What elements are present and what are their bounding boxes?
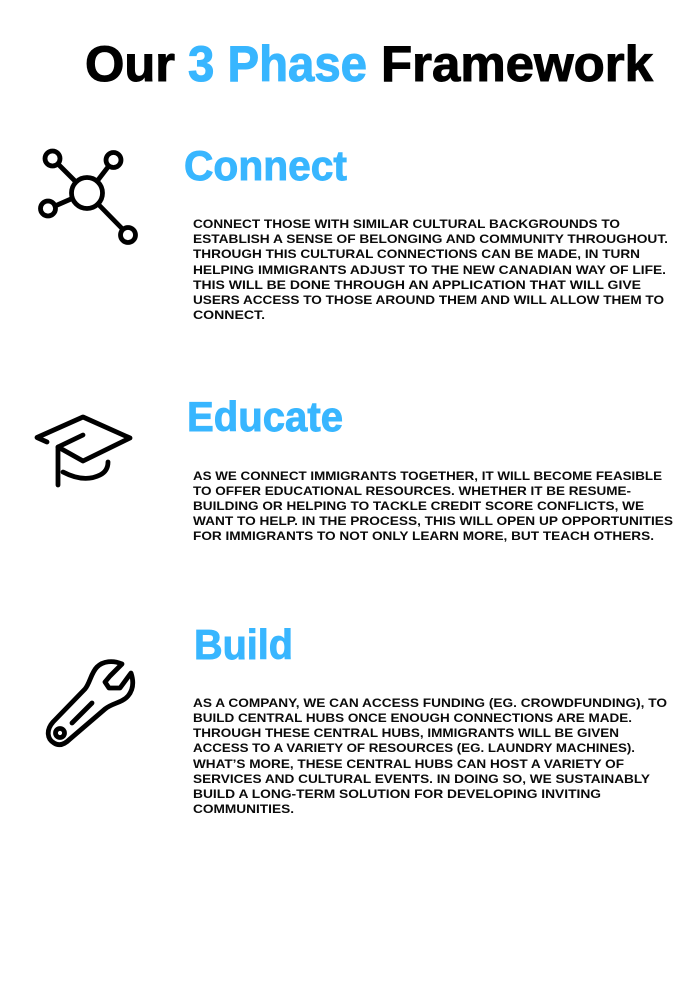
- icon: wrench: [48, 662, 133, 745]
- text block: Connect description: CONNECT.: [193, 308, 265, 322]
- heading: Build: Build: [194, 621, 293, 668]
- text block: Build description: SERVICES AND CULTURAL EVENTS. IN DOING SO, WE SUSTAINABLY: [193, 772, 650, 786]
- text block: Build description: AS A COMPANY, WE CAN ACCESS FUNDING (EG. CROWDFUNDING), TO: [193, 696, 667, 710]
- text block: Connect description: [193, 217, 668, 322]
- heading: Educate: Educate: [187, 393, 343, 440]
- text block: Build description: [193, 696, 667, 816]
- text block: Connect description: CONNECT THOSE WITH SIMILAR CULTURAL BACKGROUNDS TO: [193, 217, 620, 231]
- text block: Educate description: WANT TO HELP. IN THE PROCESS, THIS WILL OPEN UP OPPORTUNITIES: [193, 514, 673, 528]
- text block: Educate description: AS WE CONNECT IMMIGRANTS TOGETHER, IT WILL BECOME FEASIBLE: [193, 469, 662, 483]
- text block: Connect description: ESTABLISH A SENSE OF BELONGING AND COMMUNITY THROUGHOUT.: [193, 232, 668, 246]
- text block: Connect description: USERS ACCESS TO THOSE AROUND THEM AND WILL ALLOW THEM TO: [193, 293, 664, 307]
- text block: Connect description: HELPING IMMIGRANTS ADJUST TO THE NEW CANADIAN WAY OF LIFE.: [193, 263, 666, 277]
- text block: Build description: BUILD CENTRAL HUBS ONCE ENOUGH CONNECTIONS ARE MADE.: [193, 711, 632, 725]
- title: Our: [85, 36, 175, 92]
- title: Framework: [381, 36, 653, 92]
- text block: Build description: BUILD A LONG-TERM SOLUTION FOR DEVELOPING INVITING: [193, 787, 601, 801]
- text block: Educate description: BUILDING OR HELPING TO TACKLE CREDIT SCORE CONFLICTS, WE: [193, 499, 644, 513]
- heading: Connect: Connect: [184, 142, 347, 189]
- text block: Connect description: THROUGH THIS CULTURAL CONNECTIONS CAN BE MADE, IN TURN: [193, 247, 640, 261]
- text block: Build description: COMMUNITIES.: [193, 802, 294, 816]
- text block: Build description: ACCESS TO A VARIETY OF RESOURCES (EG. LAUNDRY MACHINES).: [193, 741, 635, 755]
- text block: Connect description: THIS WILL BE DONE THROUGH AN APPLICATION THAT WILL GIVE: [193, 278, 641, 292]
- text block: Educate description: TO OFFER EDUCATIONAL RESOURCES. WHETHER IT BE RESUME-: [193, 484, 631, 498]
- title: [85, 36, 653, 92]
- text block: Build description: WHAT’S MORE, THESE CENTRAL HUBS CAN HOST A VARIETY OF: [193, 757, 624, 771]
- icon: graduation cap: [37, 417, 130, 485]
- title: 3 Phase: [188, 36, 367, 92]
- text block: Build description: THROUGH THESE CENTRAL HUBS, IMMIGRANTS WILL BE GIVEN: [193, 726, 619, 740]
- text block: Educate description: FOR IMMIGRANTS TO NOT ONLY LEARN MORE, BUT TEACH OTHERS.: [193, 529, 654, 543]
- text block: Educate description: [193, 469, 673, 543]
- icon: network nodes: [40, 151, 136, 242]
